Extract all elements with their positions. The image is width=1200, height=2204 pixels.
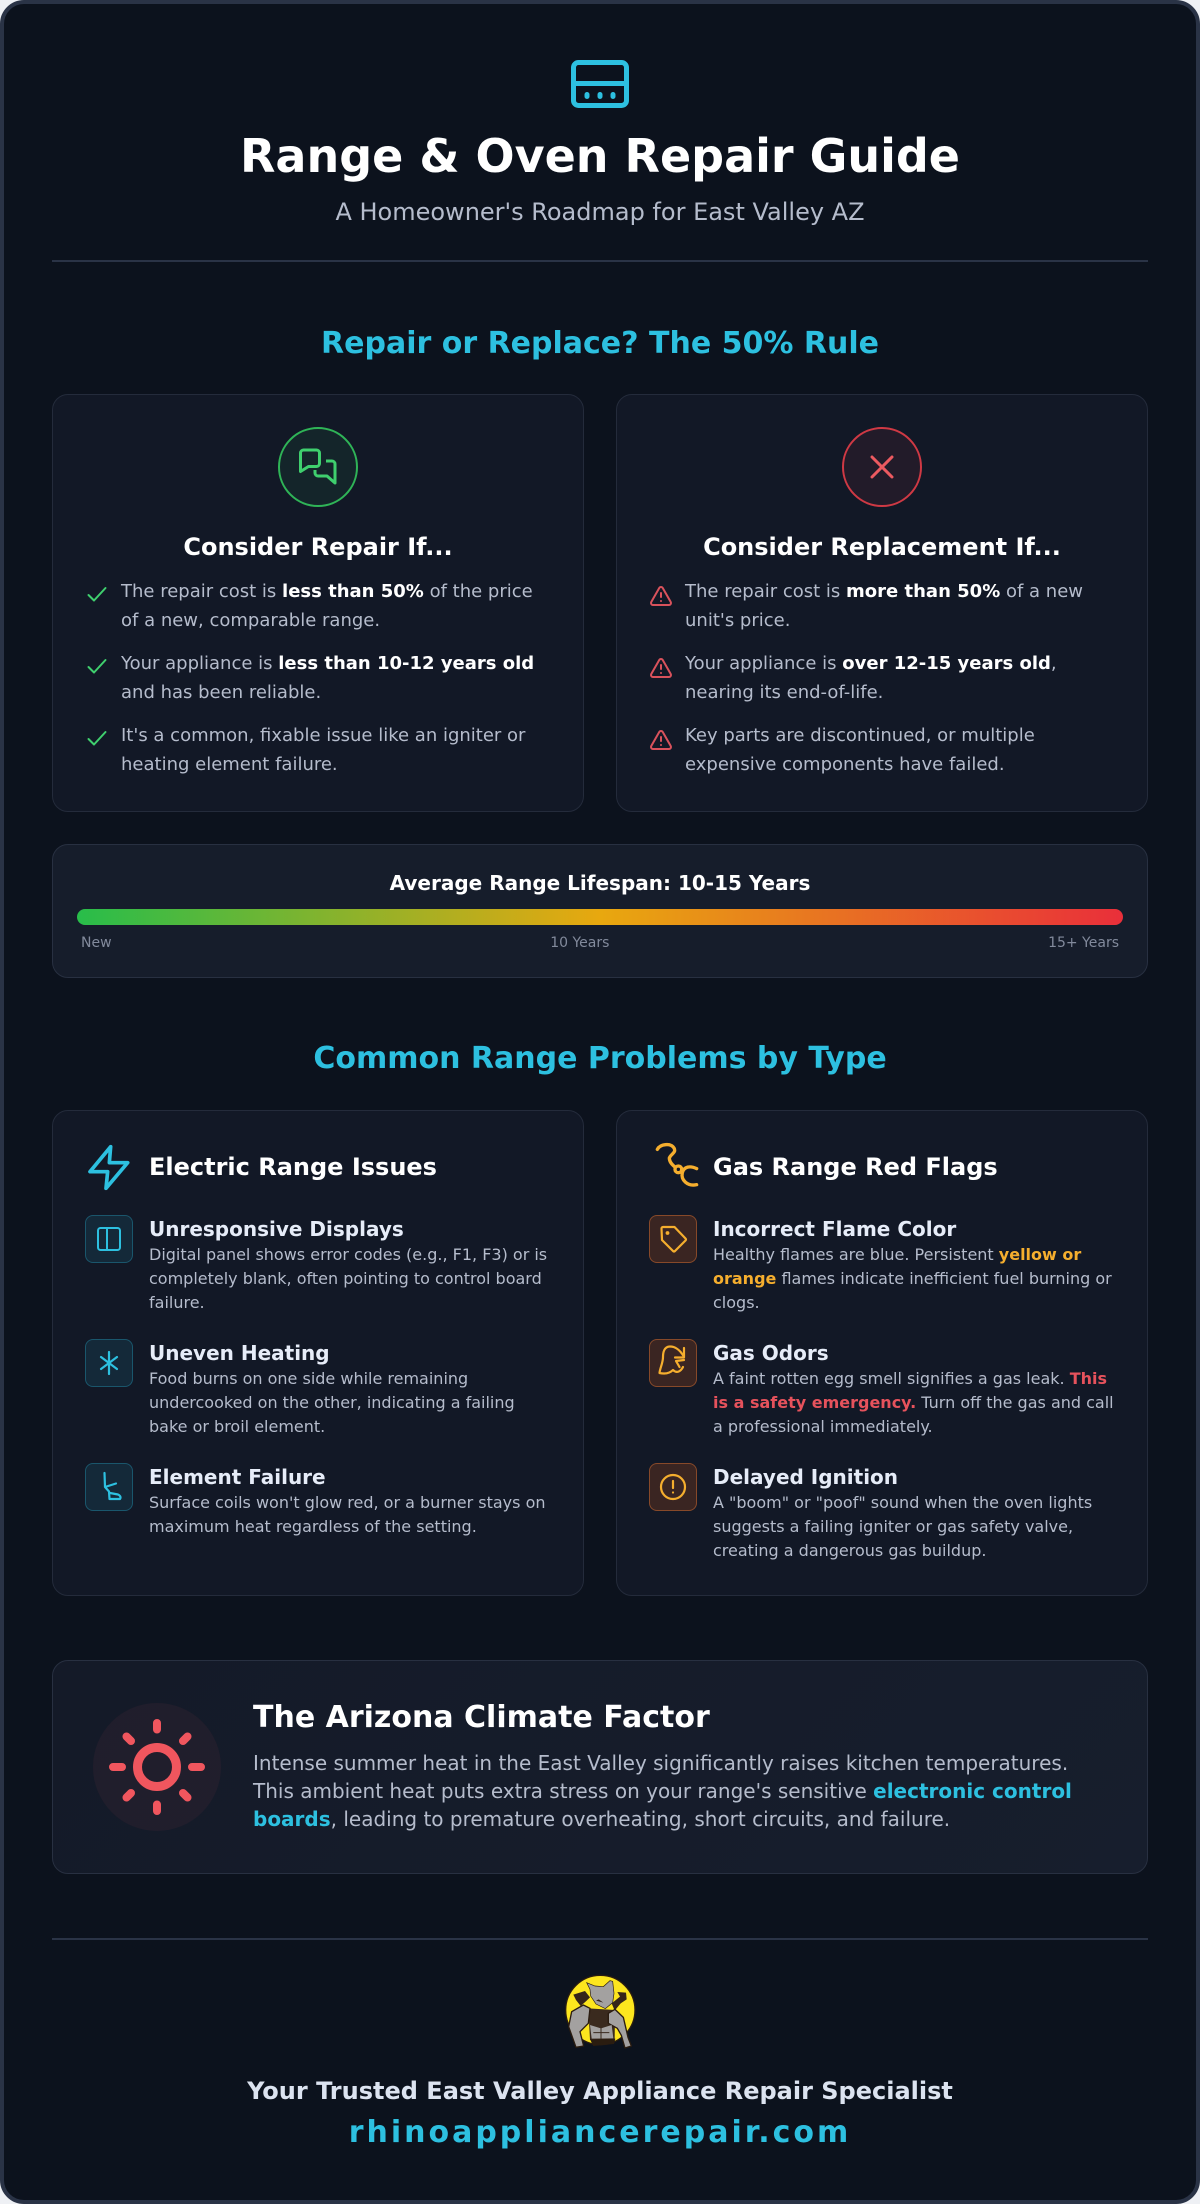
item: gas odors: A faint rotten egg smell signifies a gas leak. This bbox=[713, 1369, 1107, 1388]
panel: consider replacement bbox=[616, 394, 1148, 812]
item: uneven heating: Uneven Heating bbox=[149, 1341, 330, 1365]
replace point 2: Your appliance is over 12-15 years old, bbox=[685, 653, 1057, 674]
climate text: boards, leading to premature overheating, short circuits, and failure. bbox=[253, 1807, 950, 1831]
icon: display panel bbox=[85, 1215, 133, 1263]
item: incorrect flame color: orange flames indicate inefficient fuel burning or bbox=[713, 1269, 1112, 1288]
item: element failure: maximum heat regardless of the setting. bbox=[149, 1517, 477, 1536]
icon: alert circle bbox=[649, 1463, 697, 1511]
item: element failure: Element Failure bbox=[149, 1465, 326, 1489]
bar labels: 15+ Years bbox=[1048, 935, 1119, 951]
repair point 2: and has been reliable. bbox=[121, 682, 321, 703]
item: unresponsive displays: Unresponsive Displays bbox=[149, 1217, 404, 1241]
repair point 3 bbox=[121, 725, 526, 775]
item: uneven heating: bake or broil element. bbox=[149, 1417, 325, 1436]
item: gas odors: is a safety emergency. Turn off the gas and call bbox=[713, 1393, 1114, 1412]
footer url: rhinoappliancerepair.com bbox=[349, 2115, 851, 2150]
replace point 3 bbox=[685, 725, 1035, 775]
gradient bar bbox=[77, 909, 1123, 925]
item: uneven heating bbox=[149, 1341, 515, 1436]
warning 2 bbox=[650, 658, 672, 678]
logo: rhino mascot bbox=[565, 1974, 636, 2048]
check 1 bbox=[88, 587, 106, 602]
item: unresponsive displays: Digital panel shows error codes (e.g., F1, F3) or is bbox=[149, 1245, 547, 1264]
icon: tag bbox=[649, 1215, 697, 1263]
repair point 3: heating element failure. bbox=[121, 754, 338, 775]
panel: electric range issues bbox=[52, 1110, 584, 1596]
replace point 1: The repair cost is more than 50% of a new bbox=[685, 581, 1083, 602]
warning 3 bbox=[650, 730, 672, 750]
replace point 1 bbox=[684, 581, 1083, 631]
repair point 2 bbox=[121, 653, 534, 703]
card heading: Consider Repair If... bbox=[183, 533, 453, 561]
icon: asterisk bbox=[85, 1339, 133, 1387]
climate heading: The Arizona Climate Factor bbox=[253, 1700, 710, 1735]
climate text: This ambient heat puts extra stress on your range's sensitive electronic control bbox=[253, 1779, 1072, 1803]
repair point 1 bbox=[120, 581, 533, 631]
bar labels: New bbox=[81, 935, 112, 951]
replace point 2 bbox=[685, 653, 1057, 703]
panel: gas range red flags bbox=[616, 1110, 1148, 1596]
check 3 bbox=[88, 731, 106, 746]
item: incorrect flame color: Healthy flames are blue. Persistent yellow or bbox=[713, 1245, 1081, 1264]
item: delayed ignition bbox=[713, 1465, 1092, 1560]
title: Range & Oven Repair Guide bbox=[240, 129, 960, 183]
item: element failure: Surface coils won't glow red, or a burner stays on bbox=[149, 1493, 546, 1512]
repair point 1: The repair cost is less than 50% of the price bbox=[121, 581, 533, 602]
icon: replace x bbox=[842, 427, 922, 507]
repair point 1: of a new, comparable range. bbox=[121, 610, 380, 631]
icon: repair chat bubbles bbox=[278, 427, 358, 507]
item: incorrect flame color bbox=[713, 1217, 1112, 1312]
gas heading: Gas Range Red Flags bbox=[713, 1153, 998, 1181]
replace point 3: expensive components have failed. bbox=[685, 754, 1005, 775]
footer tagline: Your Trusted East Valley Appliance Repair Specialist bbox=[247, 2077, 953, 2105]
replace point 2: nearing its end-of-life. bbox=[685, 682, 883, 703]
item: gas odors bbox=[713, 1341, 1114, 1436]
bar labels bbox=[81, 935, 1119, 951]
item: gas odors: Gas Odors bbox=[713, 1341, 829, 1365]
icon: lightning bbox=[88, 1144, 130, 1190]
lifespan heading: Average Range Lifespan: 10-15 Years bbox=[390, 871, 810, 895]
panel: arizona climate factor bbox=[52, 1660, 1148, 1874]
item: uneven heating: undercooked on the other, indicating a failing bbox=[149, 1393, 515, 1412]
item: unresponsive displays bbox=[149, 1217, 547, 1312]
item: delayed ignition: creating a dangerous gas buildup. bbox=[713, 1541, 986, 1560]
check 2 bbox=[88, 659, 106, 674]
item: unresponsive displays: failure. bbox=[149, 1293, 205, 1312]
item: delayed ignition: A "boom" or "poof" sound when the oven lights bbox=[713, 1493, 1092, 1512]
item: delayed ignition: suggests a failing igniter or gas safety valve, bbox=[713, 1517, 1073, 1536]
icon: gas pipe bbox=[656, 1142, 698, 1187]
item: unresponsive displays: completely blank, often pointing to control board bbox=[149, 1269, 542, 1288]
icon: element coil bbox=[85, 1463, 133, 1511]
panel: consider repair bbox=[52, 394, 584, 812]
item: uneven heating: Food burns on one side while remaining bbox=[149, 1369, 468, 1388]
card heading: Consider Replacement If... bbox=[703, 533, 1061, 561]
replace point 3: Key parts are discontinued, or multiple bbox=[685, 725, 1035, 746]
icon: range oven bbox=[571, 60, 629, 108]
climate text bbox=[252, 1751, 1072, 1831]
replace point 1: unit's price. bbox=[685, 610, 790, 631]
item: delayed ignition: Delayed Ignition bbox=[713, 1465, 898, 1489]
item: gas odors: a professional immediately. bbox=[713, 1417, 933, 1436]
icon: odor refresh bbox=[649, 1339, 697, 1387]
heading: repair or replace: Repair or Replace? The 50% Rule bbox=[321, 326, 879, 361]
subtitle: A Homeowner's Roadmap for East Valley AZ bbox=[335, 198, 865, 226]
repair point 3: It's a common, fixable issue like an igniter or bbox=[121, 725, 525, 746]
item: element failure bbox=[149, 1465, 546, 1536]
heading: common problems: Common Range Problems by Type bbox=[313, 1041, 887, 1076]
icon: sun bbox=[93, 1703, 221, 1831]
climate text: Intense summer heat in the East Valley significantly raises kitchen temperatures. bbox=[253, 1751, 1068, 1775]
warning 1 bbox=[650, 586, 672, 606]
electric heading: Electric Range Issues bbox=[149, 1153, 437, 1181]
item: incorrect flame color: clogs. bbox=[713, 1293, 760, 1312]
repair point 2: Your appliance is less than 10-12 years old bbox=[121, 653, 534, 674]
item: incorrect flame color: Incorrect Flame Color bbox=[713, 1217, 956, 1241]
panel: lifespan bar bbox=[52, 844, 1148, 978]
bar labels: 10 Years bbox=[550, 935, 609, 951]
